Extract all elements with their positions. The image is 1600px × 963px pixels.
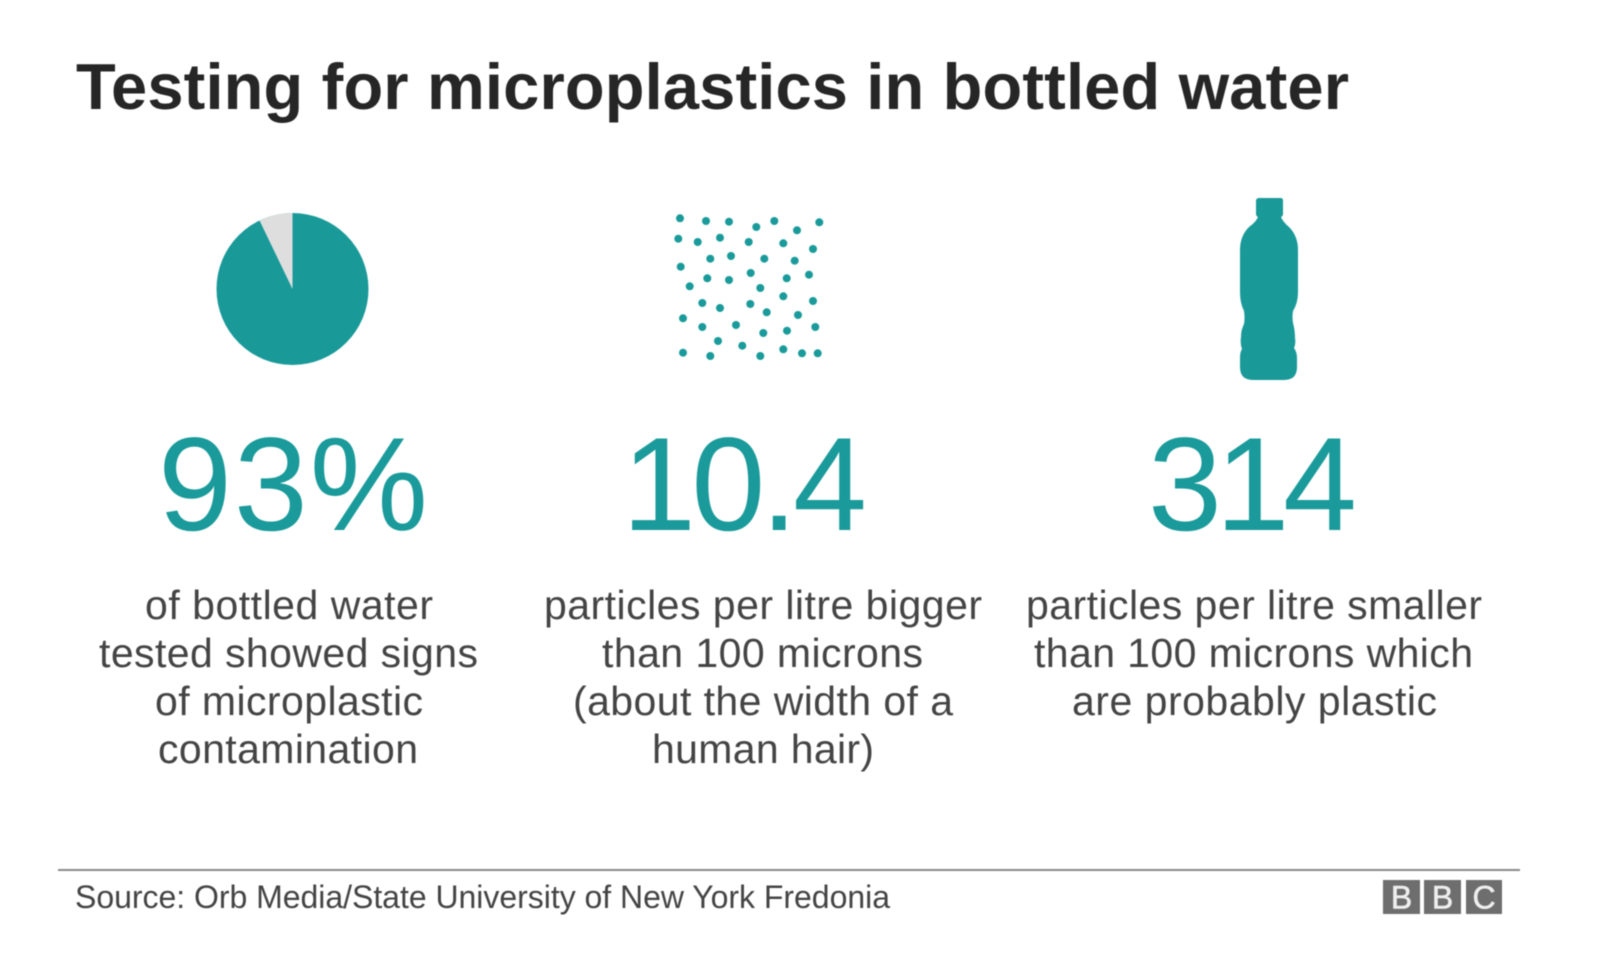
description: 314	[1026, 582, 1482, 724]
logo: BBC: B	[1391, 880, 1412, 916]
description: 93%	[99, 582, 478, 772]
logo: BBC: C	[1472, 880, 1496, 916]
logo: BBC	[1383, 880, 1502, 916]
description: 93%: of microplastic	[155, 678, 423, 724]
description: 10.4: than 100 microns	[602, 630, 923, 676]
description: 93%: of bottled water	[145, 582, 433, 628]
icon: scattered particles	[674, 214, 823, 360]
statistic: 314: 314	[1148, 411, 1357, 559]
statistic: 93%: 93%	[158, 411, 428, 559]
statistic: 10.4: 10.4	[622, 411, 867, 559]
description: 10.4: (about the width of a	[573, 678, 953, 724]
description: 93%: tested showed signs	[99, 630, 478, 676]
logo: BBC: B	[1432, 880, 1453, 916]
description: 314: than 100 microns which	[1034, 630, 1473, 676]
description: 314: particles per litre smaller	[1026, 582, 1482, 628]
description: 314: are probably plastic	[1072, 678, 1437, 724]
panel: 93 percent contaminated	[99, 213, 478, 772]
title: Testing for microplastics in bottled water	[76, 50, 1349, 123]
description: 10.4: particles per litre bigger	[544, 582, 982, 628]
description: 93%: contamination	[158, 726, 418, 772]
icon: pie chart showing 93%	[216, 213, 368, 365]
description: 10.4	[544, 582, 982, 772]
source text: Source: Orb Media/State University of New York Fredonia	[75, 879, 890, 915]
icon: plastic bottle	[1240, 198, 1298, 380]
panel: 314 particles	[1026, 198, 1482, 724]
panel: 10.4 particles	[544, 214, 982, 772]
description: 10.4: human hair)	[652, 726, 874, 772]
